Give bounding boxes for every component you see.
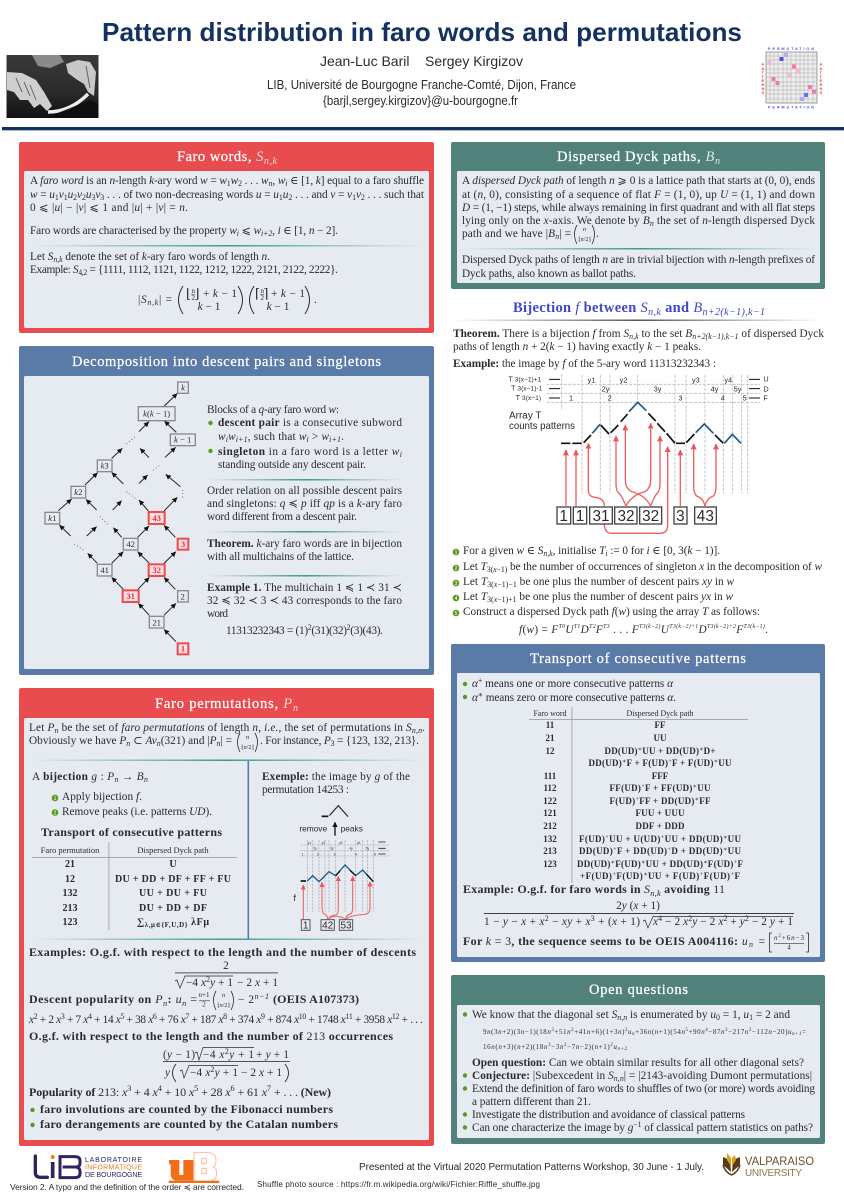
diagram: image by g of 14253 <box>293 806 390 932</box>
list: open questions: 9n(3n+2)(3n−1)(18n3+51n2+41n+6)(1+3n)2un+36n(n+1)(54n5+90n4−87n3−217n2−112n−20)un+1= <box>483 1028 806 1037</box>
table: faro word to Dyck path patterns: FFF <box>652 771 669 781</box>
logo: uB university <box>169 1153 219 1183</box>
logo: Valparaiso University <box>723 1153 814 1179</box>
table: faro word to Dyck path patterns: DD(UD)+F + DD(UD)+D + DD(UD)∗UU <box>579 846 742 856</box>
list: open questions: Investigate the distribution and avoidance of classical patterns <box>472 1109 745 1121</box>
diagram: bijection f example: T 3(x−1)-1 <box>511 384 543 393</box>
text block: example 1: 11313232343 = (1)2(31)(32)2(3)(43). <box>226 623 383 637</box>
list: construction steps: Let T3(x−1)+1 be one plus the number of descent pairs yx in w <box>463 591 733 604</box>
affiliation: {barjl,sergey.kirgizov}@u-bourgogne.fr <box>323 94 518 108</box>
logo: Valparaiso University: VALPARAISO <box>745 1156 814 1168</box>
text block: definition <box>30 175 425 238</box>
diagram: bijection f example: 2 <box>608 393 612 402</box>
text block: definition: Obviously we have Pn ⊂ Avn(321) and |Pn| = <box>29 735 232 748</box>
chart: lattice of descent pairs and singletons: 2 <box>181 591 185 601</box>
text block: definition: D = (1, −1) steps, while always remaining in first quadrant and with all flat steps <box>461 202 815 214</box>
heading: decomposition: Decomposition into descent pairs and singletons <box>72 354 381 370</box>
text block: theorem: Example: the image by f of the 5-ary word 11313232343 : <box>453 358 716 370</box>
icon: permutation grid: T <box>762 70 764 75</box>
list: construction steps: For a given w ∈ Sn,k, initialise Ti := 0 for i ∈ [0, 3(k − 1)]. <box>463 545 720 558</box>
table: transport of consecutive patterns for permutations: 12 <box>65 874 75 885</box>
list: open questions: Conjecture: |Subexcedent in Sn,n| = |2143-avoiding Dumont permutations| <box>472 1070 812 1083</box>
text block: notation and example <box>30 251 338 277</box>
icon: permutation grid: P <box>762 62 764 67</box>
table: transport of consecutive patterns for permutations: Transport of consecutive patterns <box>41 825 222 839</box>
table: faro word to Dyck path patterns <box>529 707 748 883</box>
table: faro word to Dyck path patterns: 111 <box>544 771 557 781</box>
text block: theorem: with all multichains of the lattice. <box>207 551 354 563</box>
diagram: bijection f example: 43 <box>697 508 714 525</box>
text block: definition: ⌊n/2⌋ <box>578 236 591 243</box>
list: construction steps: 2 <box>455 566 458 572</box>
diagram: image by g of 14253: remove <box>299 824 327 834</box>
diagram: bijection f example: 32 <box>617 508 635 525</box>
table: faro word to Dyck path patterns: 213 <box>543 846 557 856</box>
list: open questions <box>463 1009 815 1134</box>
text block: definition: . <box>596 228 599 240</box>
text block: definition: n <box>583 226 586 233</box>
text block: generating functions: (OEIS A107373) <box>273 992 359 1006</box>
text block: generating functions: y <box>164 1067 171 1079</box>
list: open questions: We know that the diagonal set Sn,n is enumerated by u0 = 1, u1 = 2 and <box>472 1009 790 1022</box>
text block: generating functions: Descent popularity on Pn: un = <box>29 992 197 1008</box>
text block: generating functions: (y − 1) <box>163 1049 195 1061</box>
list: construction steps <box>453 545 822 618</box>
list: construction steps: 4 <box>455 596 458 602</box>
icon: permutation grid: PERMUTATION <box>768 106 814 110</box>
diagram: image by g of 14253: y3 <box>339 841 343 845</box>
table: transport of consecutive patterns for permutations: Faro permutation <box>41 845 100 855</box>
panel: dispersed Dyck paths <box>451 142 825 289</box>
diagram: bijection f example: 1 <box>576 508 584 525</box>
text block: generating functions: x2 + 2 x3 + 7 x4 + 14 x5 + 38 x6 + 76 x7 + 187 x8 + 374 x9 + 874 x10 + 1748 x11 + 3958 x12 + . . . <box>28 1012 423 1026</box>
text block: theorem <box>453 328 824 370</box>
text block: order relation: and singletons: q ≼ p iff qp is a k-ary faro <box>207 498 402 510</box>
diagram: bijection f example: y4 <box>724 376 732 385</box>
panel: open questions <box>451 975 825 1144</box>
table: faro word to Dyck path patterns: DD(UD)∗UU + DD(UD)∗D+ <box>604 746 716 756</box>
icon: permutation grid: S <box>762 90 764 95</box>
text block: bijection g <box>32 771 212 818</box>
text block: bijection g: 1 <box>54 796 57 802</box>
text block: blocks definition: wiwi+1, such that wi > wi+1. <box>218 431 344 444</box>
icon: permutation grid: P <box>820 62 822 67</box>
text block: order relation: word different from a descent pair. <box>207 511 357 523</box>
text block: bijection g: Apply bijection f. <box>62 791 142 803</box>
text block: example 1 <box>207 582 402 637</box>
table: transport of consecutive patterns for permutations: ∑λ,μ∈{F,U,D} λFμ <box>137 917 209 929</box>
text block: generating functions: Examples: O.g.f. with respect to the length and the number of descents <box>29 945 416 959</box>
icon: permutation grid: T <box>820 74 822 79</box>
text block: blocks definition <box>207 404 402 471</box>
chart: lattice of descent pairs and singletons: k3 <box>101 461 109 471</box>
table: faro word to Dyck path patterns: DDF + DDD <box>636 821 685 831</box>
formula: size of S n,k: |Sn,k| = <box>138 294 172 307</box>
text block: definition: A faro word is an n-length k-ary word w = w1w2 . . . wn, wi ∈ [1, k] equal to a faro shuffle <box>30 175 424 188</box>
text block: ballot paths: Dispersed Dyck paths of length n are in trivial bijection with n-length prefixes of <box>462 254 815 266</box>
text block: ballot paths: Dyck paths, also known as ballot paths. <box>462 268 636 280</box>
diagram: bijection f example: T 3(x−1)+1 <box>508 374 542 383</box>
text block: bijection g: Remove peaks (i.e. patterns UD). <box>62 806 212 818</box>
list: construction steps: Let T3(x−1)−1 be one plus the number of descent pairs xy in w <box>463 576 734 589</box>
panel: faro permutations <box>19 688 434 1146</box>
text block: generating functions: −4 x2y + 1 <box>203 1047 254 1061</box>
text block: theorem: paths of length n + 2(k − 1) having exactly k − 1 peaks. <box>453 341 701 353</box>
diagram: bijection f example: D <box>763 384 769 393</box>
formula: size of S n,k <box>138 286 317 314</box>
version note: Version 2. A typo and the definition of the order ≼ are corrected. <box>10 1182 244 1192</box>
text block: definition: path and we have |Bn| = <box>462 228 571 241</box>
diagram: bijection f example: T 3(x−1) <box>516 393 541 402</box>
list: alpha notation: α∗ means zero or more consecutive patterns α. <box>472 690 676 704</box>
diagram: bijection f example: U <box>763 375 769 384</box>
list: involutions and derangements <box>30 1102 338 1131</box>
text block: generating functions: − 2n−1 <box>238 992 269 1006</box>
text block: generating functions <box>28 945 423 1099</box>
diagram: bijection f example <box>508 374 769 533</box>
text block: example avoiding 11: For k = 3, the sequence seems to be OEIS A004116: <box>463 934 738 948</box>
table: faro word to Dyck path patterns: UU <box>654 733 667 743</box>
text block: generating functions: −4 x2y + 1 <box>190 1065 238 1079</box>
heading: transport: Transport of consecutive patterns <box>530 651 746 667</box>
text block: blocks definition: standing outside any descent pair. <box>218 459 366 471</box>
chart: lattice of descent pairs and singletons: 32 <box>152 565 161 575</box>
diagram: image by g of 14253: 2y <box>313 847 317 851</box>
icon: permutation grid: PERMUTATION <box>768 47 814 51</box>
diagram: bijection f example: 1 <box>559 508 568 525</box>
panel: faro words <box>19 142 434 333</box>
formula: size of S n,k: 2 <box>260 294 264 302</box>
text block: blocks definition: singleton in a faro word is a letter wi <box>218 446 402 459</box>
table: faro word to Dyck path patterns: F(UD)+UU + U(UD)+UU + DD(UD)∗UU <box>579 834 742 844</box>
logo: LIB laboratory: DE BOURGOGNE <box>85 1172 142 1179</box>
text block: generating functions: n <box>222 992 225 999</box>
table: faro word to Dyck path patterns: 212 <box>543 821 557 831</box>
authors: Jean-Luc Baril Sergey Kirgizov <box>320 53 523 69</box>
table: faro word to Dyck path patterns: F(UD)+FF + DD(UD)∗FF <box>610 796 711 806</box>
table: transport of consecutive patterns for permutations <box>32 825 237 930</box>
heading: open questions: Open questions <box>589 982 688 998</box>
table: transport of consecutive patterns for permutations: Dispersed Dyck path <box>137 845 209 855</box>
text block: example avoiding 11: 4 <box>787 944 791 952</box>
list: construction steps: 1 <box>455 550 458 556</box>
text block: generating functions: 2 <box>202 1000 206 1008</box>
list: involutions and derangements: faro involutions are counted by the Fibonacci numbers <box>40 1102 333 1116</box>
icon: permutation grid: T <box>762 74 764 79</box>
diagram: bijection f example: F <box>763 394 768 403</box>
heading: faro permutations: Faro permutations, Pn <box>155 696 298 714</box>
text block: generating functions: O.g.f. with respect to the length and the number of 213 occurrences <box>29 1029 393 1043</box>
text block: ballot paths <box>462 254 815 280</box>
icon: permutation grid: A <box>820 66 822 71</box>
text block: example of g: Exemple: the image by g of the <box>262 771 410 783</box>
formula: size of S n,k: ⌈ ⌉ <box>255 286 268 301</box>
list: open questions: Open question: Can we obtain similar results for all other diagonal sets? <box>472 1057 804 1069</box>
diagram: bijection f example: y2 <box>620 376 627 385</box>
text block: example of g: permutation 14253 : <box>262 784 349 796</box>
diagram: image by g of 14253: 1 <box>303 921 309 932</box>
text block: definition: n <box>246 734 249 741</box>
heading: bijection f: Bijection f between Sn,k and Bn+2(k−1),k−1 <box>513 300 765 318</box>
chart: lattice of descent pairs and singletons: 1 <box>181 644 185 654</box>
text block: example avoiding 11: un = <box>742 936 765 949</box>
diagram: bijection f example: 1 <box>569 393 573 402</box>
text block: example avoiding 11: Example: O.g.f. for faro words in Sn,k avoiding 11 <box>463 882 725 898</box>
text block: bijection g: A bijection g : Pn → Bn <box>32 771 148 784</box>
diagram: image by g of 14253: f <box>293 893 296 903</box>
diagram: image by g of 14253: 5 <box>374 852 376 856</box>
formula: size of S n,k: ⌊ ⌋ <box>186 286 199 301</box>
text block: definition: w = u1v1u2v2u3v3 . . . of two non-decreasing words u = u1u2 . . . and v = v1v2 . . . such that <box>30 189 425 202</box>
text block: example avoiding 11: 2y (x + 1) <box>616 900 660 912</box>
logo: Valparaiso University: UNIVERSITY <box>745 1168 802 1179</box>
text block: example 1: Example 1. The multichain 1 ≼ 1 ≺ 31 ≺ <box>207 582 402 594</box>
diagram: bijection f example: 4 <box>721 393 725 402</box>
text block: generating functions: 2 <box>223 960 229 972</box>
list: construction steps: Let T3(x−1) be the number of occurrences of singleton x in the decomposition of w <box>463 561 822 574</box>
diagram: bijection f example: 3 <box>676 508 685 525</box>
formula: size of S n,k: k − 1 <box>267 301 289 313</box>
diagram: bijection f example: y3 <box>692 376 700 385</box>
diagram: image by g of 14253: y2 <box>322 841 325 845</box>
chart: lattice of descent pairs and singletons: k − 1 <box>174 435 191 445</box>
affiliation: LIB, Université de Bourgogne Franche-Comté, Dijon, France <box>267 78 576 92</box>
text block: example 1: 32 ≼ 32 ≺ 3 ≺ 43 corresponds to the faro <box>207 595 402 607</box>
chart: lattice of descent pairs and singletons: k2 <box>74 487 82 497</box>
diagram: image by g of 14253: y4 <box>357 841 361 845</box>
presented at note: Presented at the Virtual 2020 Permutation Patterns Workshop, 30 June - 1 July. <box>359 1162 704 1173</box>
table: transport of consecutive patterns for permutations: DU + DD + DF + FF + FU <box>115 874 231 885</box>
text block: generating functions: n+1 <box>199 991 210 999</box>
list: alpha notation <box>463 676 676 704</box>
list: construction steps: 3 <box>455 581 458 587</box>
text block: blocks definition: Blocks of a q-ary faro word w: <box>207 404 339 416</box>
list: involutions and derangements: faro derangements are counted by the Catalan numbers <box>40 1117 338 1131</box>
photo: riffle shuffle <box>6 55 98 118</box>
diagram: bijection f example: 5y <box>734 385 742 394</box>
list: open questions: 16n(n+3)(n+2)(18n3−3n2−7n−2)(n+1)2un+2 <box>483 1043 628 1052</box>
diagram: image by g of 14253: peaks <box>341 824 363 834</box>
table: faro word to Dyck path patterns: DD(UD)∗F(UD)∗UU + DD(UD)∗F(UD)+F <box>577 859 744 869</box>
icon: permutation grid <box>762 47 822 110</box>
diagram: bijection f example: 4y <box>711 385 719 394</box>
table: transport of consecutive patterns for permutations: U <box>169 859 177 870</box>
text block: definition: Let Pn be the set of faro permutations of length n, i.e., the set of permutations in Sn,n. <box>29 722 425 735</box>
text block: theorem <box>207 538 402 563</box>
formula: size of S n,k: n <box>260 287 264 295</box>
list: construction steps: 5 <box>455 611 458 617</box>
chart: lattice of descent pairs and singletons: 41 <box>100 565 109 575</box>
table: faro word to Dyck path patterns: Faro word <box>533 709 567 718</box>
chart: lattice of descent pairs and singletons: k1 <box>48 513 56 523</box>
diagram: image by g of 14253: 53 <box>340 921 352 932</box>
icon: permutation grid: E <box>762 78 764 83</box>
table: faro word to Dyck path patterns: FF <box>654 720 666 730</box>
table: faro word to Dyck path patterns: 122 <box>543 796 557 806</box>
table: faro word to Dyck path patterns: 132 <box>543 834 557 844</box>
text block: generating functions: − 2 x + 1 <box>237 977 278 989</box>
diagram: image by g of 14253: 1 <box>302 852 304 856</box>
text block: theorem: Theorem. k-ary faro words are in bijection <box>207 538 402 550</box>
text block: generating functions: − 2 x + 1 <box>241 1067 282 1079</box>
logo: LIB laboratory <box>35 1155 142 1179</box>
text block: definition: . For instance, P3 = {123, 132, 213}. <box>260 735 419 748</box>
list: open questions: Can one characterize the image by g−1 of classical pattern statistics on paths? <box>472 1120 813 1134</box>
text block: definition: 0 ⩽ |u| − |v| ⩽ 1 and |u| + |v| = n. <box>30 202 188 214</box>
table: transport of consecutive patterns for permutations: 123 <box>62 917 78 928</box>
text block: definition: at (n, 0), consisting of a sequence of flat F = (1, 0), up U = (1, 1) and down <box>462 189 815 201</box>
diagram: bijection f example: 5 <box>743 393 747 402</box>
text block: example avoiding 11: n2+6n−3 <box>774 934 804 942</box>
diagram: bijection f example: Array T <box>509 410 542 421</box>
table: faro word to Dyck path patterns: +F(UD)+F(UD)∗UU + F(UD)+F(UD)+F <box>580 871 740 881</box>
diagram: bijection f example: 3y <box>654 385 662 394</box>
heading: faro words: Faro words, Sn,k <box>177 149 278 167</box>
icon: permutation grid: R <box>762 82 764 87</box>
table: transport of consecutive patterns for permutations: 132 <box>62 888 78 899</box>
text block: theorem: Theorem. There is a bijection f from Sn,k to the set Bn+2(k−1),k−1 of dispersed Dyck <box>453 328 824 341</box>
logo: LIB laboratory: INFORMATIQUE <box>85 1164 142 1172</box>
chart: lattice of descent pairs and singletons: k <box>181 382 185 392</box>
table: transport of consecutive patterns for permutations: 21 <box>65 859 75 870</box>
text block: definition <box>29 722 425 752</box>
text block: notation and example: Example: S4,2 = {1111, 1112, 1121, 1122, 1212, 1222, 2121, 2122, 2222}. <box>30 264 338 277</box>
text block: example 1: word <box>207 608 228 620</box>
formula: size of S n,k: . <box>314 294 317 306</box>
heading: dispersed Dyck paths: Dispersed Dyck paths, Bn <box>557 149 720 167</box>
text block: generating functions: ⌊n/2⌋ <box>217 1002 230 1009</box>
icon: permutation grid: R <box>820 82 822 87</box>
diagram: bijection f example: counts patterns <box>509 421 575 432</box>
table: transport of consecutive patterns for permutations: DU + DD + DF <box>139 903 207 914</box>
chart: lattice of descent pairs and singletons: 31 <box>126 591 135 601</box>
table: faro word to Dyck path patterns: 12 <box>546 746 555 756</box>
icon: permutation grid: S <box>820 90 822 95</box>
formula: f(w): f(w) = FT0UT1DT2FT3 . . . FT3(k−2)UT3(k−2)+1DT3(k−2)+2FT3(k−1). <box>519 623 768 636</box>
chart: lattice of descent pairs and singletons: 42 <box>126 539 135 549</box>
text block: order relation: Order relation on all possible descent pairs <box>207 485 402 497</box>
diagram: image by g of 14253: 3 <box>334 852 336 856</box>
formula: size of S n,k: + k − 1 <box>271 288 305 300</box>
text block: generating functions: + y + 1 <box>256 1049 289 1061</box>
text block: definition: A dispersed Dyck path of length n ⩾ 0 is a lattice path that starts at (0, 0), ends <box>462 175 815 187</box>
table: faro word to Dyck path patterns: 11 <box>546 720 555 730</box>
text block: example avoiding 11 <box>463 882 808 952</box>
text block: order relation <box>207 485 402 523</box>
diagram: image by g of 14253: 5y <box>366 847 370 851</box>
text block: notation and example: Let Sn,k denote the set of k-ary faro words of length n. <box>30 251 270 264</box>
panel: transport of consecutive patterns <box>451 644 825 962</box>
panel: decomposition <box>19 346 434 675</box>
table: faro word to Dyck path patterns: FUU + UUU <box>636 808 685 818</box>
table: faro word to Dyck path patterns: Dispersed Dyck path <box>626 709 694 718</box>
formula: size of S n,k: n <box>192 287 196 295</box>
icon: permutation grid: N <box>762 86 764 91</box>
diagram: image by g of 14253: y1 <box>308 841 311 845</box>
diagram: bijection f example: 2y <box>602 385 610 394</box>
chart: lattice of descent pairs and singletons: 43 <box>152 513 162 523</box>
logo: LIB laboratory: LABORATOIRE <box>85 1157 142 1164</box>
table: transport of consecutive patterns for permutations: 213 <box>62 903 78 914</box>
text block: bijection g: 2 <box>54 810 57 816</box>
diagram: image by g of 14253: 3y <box>330 847 334 851</box>
chart: lattice of descent pairs and singletons: k(k − 1) <box>143 409 170 419</box>
diagram: bijection f example: y1 <box>588 376 595 385</box>
list: open questions: a pattern different than 21. <box>472 1096 591 1108</box>
table: faro word to Dyck path patterns: FF(UD)+F + FF(UD)∗UU <box>610 783 711 793</box>
diagram: bijection f example: 3 <box>678 393 682 402</box>
table: transport of consecutive patterns for permutations: UU + DU + FU <box>139 888 207 899</box>
text block: definition: ⌊n/2⌋ <box>241 744 254 751</box>
formula: size of S n,k: k − 1 <box>198 301 220 313</box>
icon: permutation grid: E <box>820 78 822 83</box>
title: Pattern distribution in faro words and permutations <box>102 17 742 47</box>
photo source note: Shuffle photo source : https://fr.m.wikipedia.org/wiki/Fichier:Riffle_shuffle.jpg <box>257 1180 540 1189</box>
formula: size of S n,k: 2 <box>192 294 196 302</box>
affiliation <box>267 78 576 108</box>
chart: lattice of descent pairs and singletons: 3 <box>181 539 186 549</box>
list: alpha notation: α+ means one or more consecutive patterns α <box>472 676 674 690</box>
icon: permutation grid: N <box>820 86 822 91</box>
diagram: bijection f example: 32 <box>642 508 659 525</box>
table: faro word to Dyck path patterns: 112 <box>543 783 557 793</box>
icon: permutation grid: T <box>820 70 822 75</box>
diagram: image by g of 14253: 42 <box>322 921 334 932</box>
text block: definition <box>461 175 815 244</box>
diagram: image by g of 14253: 4 <box>355 852 357 856</box>
text block: definition: lying only on the x-axis. We denote by Bn the set of n-length dispersed Dyck <box>462 215 815 228</box>
chart: lattice of descent pairs and singletons <box>45 382 195 654</box>
table: faro word to Dyck path patterns: DD(UD)∗F + F(UD)+F + F(UD)∗UU <box>588 758 732 768</box>
text block: generating functions: −4 x2y + 1 <box>186 975 233 989</box>
text block: example of g <box>262 771 410 796</box>
icon: permutation grid: A <box>762 66 764 71</box>
text block: example avoiding 11: 1 − y − x + x2 − xy + x3 + (x + 1) <box>484 914 640 928</box>
text block: generating functions: Popularity of 213: x3 + 4 x4 + 10 x5 + 28 x6 + 61 x7 + . . . (New) <box>29 1084 331 1099</box>
table: faro word to Dyck path patterns: 121 <box>543 808 557 818</box>
chart: lattice of descent pairs and singletons: 21 <box>152 617 161 627</box>
diagram: image by g of 14253: 4y <box>349 847 353 851</box>
text block: definition: Faro words are characterised by the property wi ⩽ wi+2, i ∈ [1, n − 2]. <box>30 225 338 238</box>
text block: example avoiding 11: x4 − 2 x2y − 2 x2 + y2 − 2 y + 1 <box>652 914 793 928</box>
formula: size of S n,k: + k − 1 <box>203 288 237 300</box>
table: faro word to Dyck path patterns: 21 <box>546 733 555 743</box>
table: faro word to Dyck path patterns: 123 <box>543 859 557 869</box>
diagram: bijection f example: 31 <box>592 508 610 525</box>
list: construction steps: Construct a dispersed Dyck path f(w) using the array T as follows: <box>463 606 760 618</box>
text block: blocks definition: descent pair is a consecutive subword <box>218 417 402 429</box>
diagram: image by g of 14253: 2 <box>317 852 319 856</box>
list: open questions: Extend the definition of faro words to shuffles of two (or more) words avoiding <box>472 1083 815 1095</box>
